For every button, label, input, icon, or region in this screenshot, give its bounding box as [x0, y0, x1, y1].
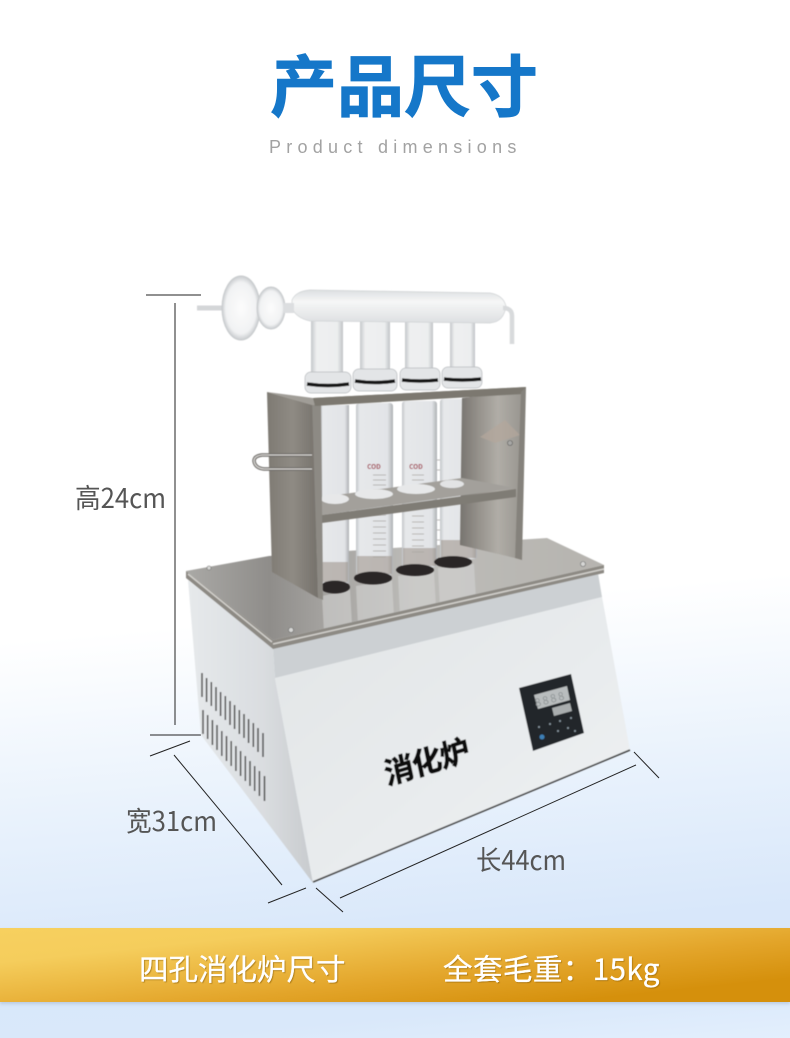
- title: 产品尺寸: [270, 34, 538, 131]
- top steel plate: [186, 538, 604, 640]
- test tubes: [320, 399, 477, 594]
- graduation marks: [373, 460, 440, 557]
- rack handle: [254, 455, 312, 469]
- manifold body: [292, 290, 506, 323]
- front face: [275, 597, 630, 883]
- rack left panel: [267, 392, 318, 598]
- bottom edge: [313, 750, 630, 882]
- flanges: [305, 367, 482, 393]
- sealing rings: [307, 379, 481, 386]
- band text right: 全套毛重：15kg: [443, 947, 660, 989]
- stainless rack: [254, 387, 526, 600]
- length label: 长44cm: [476, 839, 566, 878]
- small bulb: [257, 287, 285, 329]
- dimension lines: [146, 295, 659, 912]
- width label: 宽31cm: [126, 800, 217, 839]
- large bulb: [222, 276, 260, 340]
- side vents: [202, 673, 264, 801]
- height label: 高24cm: [75, 477, 166, 516]
- down tubes: [311, 318, 475, 372]
- rack right panel: [460, 391, 523, 558]
- subtitle: Product dimensions: [269, 137, 522, 157]
- COD labels: COD: [367, 461, 381, 471]
- plate rim: [186, 565, 604, 649]
- left side face: [188, 580, 313, 883]
- rack front post: [312, 400, 323, 600]
- band text left: 四孔消化炉尺寸: [139, 947, 346, 989]
- test tubes: COD: [409, 461, 423, 471]
- plate screws: [207, 562, 586, 632]
- glass manifold: [197, 276, 512, 393]
- tube base shading: [321, 540, 476, 582]
- rack top bar: [267, 387, 526, 405]
- nozzle: [197, 306, 224, 310]
- right elbow: [503, 308, 512, 344]
- panel digits: 8888: [533, 688, 566, 711]
- machine base: [186, 538, 630, 883]
- holes: [320, 580, 350, 594]
- control panel: [519, 674, 584, 751]
- front upper band: [273, 573, 602, 678]
- machine label: 消化炉: [380, 725, 473, 794]
- rack right post: [515, 387, 526, 560]
- bottom band: [0, 928, 790, 1002]
- plate reflections of tubes: [322, 564, 476, 632]
- rack shelf: [322, 478, 515, 515]
